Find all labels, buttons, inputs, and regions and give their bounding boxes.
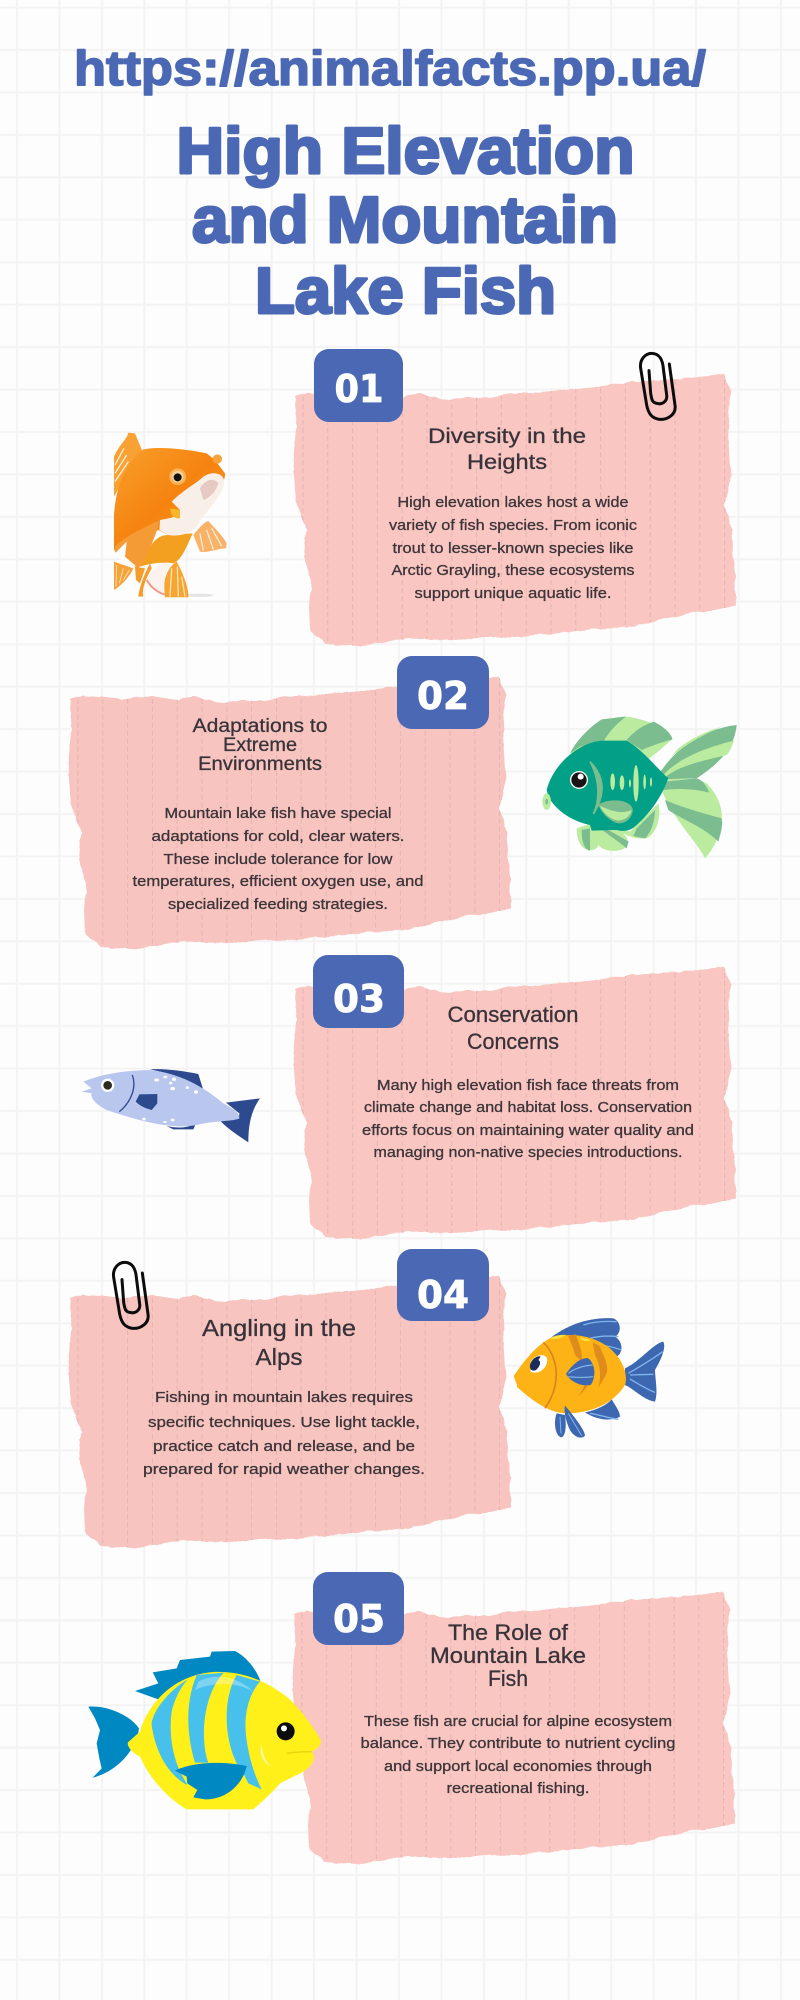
heading 5 — [430, 1620, 586, 1691]
heading 5: The Role of — [448, 1620, 569, 1645]
body text 5: These fish are crucial for alpine ecosystem — [364, 1713, 672, 1730]
heading 4: Alps — [256, 1344, 302, 1370]
panel: conservation concerns — [293, 955, 737, 1241]
heading 3: Concerns — [467, 1029, 559, 1054]
body text 2: specialized feeding strategies. — [168, 896, 388, 913]
panel: the role of mountain lake fish — [292, 1572, 736, 1866]
body text 3: Many high elevation fish face threats from — [377, 1077, 679, 1094]
body text 4 — [143, 1389, 425, 1478]
body text 4: specific techniques. Use light tackle, — [148, 1414, 420, 1431]
torn paper 4 — [68, 1274, 512, 1550]
torn paper 1 — [293, 372, 737, 648]
badge 04 — [397, 1249, 489, 1321]
badge 05: 05 — [333, 1597, 385, 1641]
body text 1: High elevation lakes host a wide — [398, 494, 628, 511]
body text 1: variety of fish species. From iconic — [389, 517, 638, 534]
body text 5: balance. They contribute to nutrient cycling — [360, 1735, 676, 1752]
icon: yellow striped fish — [88, 1651, 321, 1809]
body text 4: practice catch and release, and be — [153, 1438, 415, 1455]
body text 2 — [132, 805, 424, 913]
body text 1: trout to lesser-known species like — [392, 540, 634, 557]
body text 5: and support local economies through — [384, 1758, 652, 1775]
heading 1: Heights — [467, 451, 547, 474]
body text 2: temperatures, efficient oxygen use, and — [132, 873, 424, 890]
title: and Mountain — [192, 183, 618, 256]
panel: adaptations to extreme environments — [68, 656, 512, 951]
heading 2: Adaptations to — [192, 715, 328, 737]
badge 03 — [313, 955, 404, 1028]
body text 3: managing non-native species introductions. — [374, 1144, 682, 1161]
icon: goldfish photo — [113, 433, 227, 597]
body text 3: climate change and habitat loss. Conservation — [364, 1099, 692, 1116]
heading 1 — [428, 425, 586, 474]
heading 4 — [202, 1315, 356, 1370]
body text 1: Arctic Grayling, these ecosystems — [392, 562, 634, 579]
badge 02 — [397, 656, 489, 729]
heading 1: Diversity in the — [428, 425, 586, 448]
icon: orange fish — [514, 1318, 664, 1438]
heading 5: Mountain Lake — [430, 1643, 586, 1668]
badge 03: 03 — [333, 977, 385, 1021]
body text 4: prepared for rapid weather changes. — [143, 1461, 425, 1478]
body text 4: Fishing in mountain lakes requires — [155, 1389, 413, 1406]
title: Lake Fish — [255, 254, 556, 327]
icon: green fish — [542, 717, 737, 858]
heading 3 — [448, 1002, 578, 1054]
badge 01: 01 — [334, 367, 384, 411]
heading 4: Angling in the — [202, 1315, 356, 1341]
panel: diversity in the heights — [293, 349, 737, 648]
body text 5: recreational fishing. — [446, 1780, 590, 1797]
torn paper 5 — [292, 1590, 736, 1866]
heading 5: Fish — [488, 1666, 528, 1691]
title: High Elevation — [176, 114, 634, 187]
heading 2: Environments — [198, 753, 322, 775]
body text 1: support unique aquatic life. — [414, 585, 612, 602]
badge 01 — [314, 349, 403, 422]
paperclip 4 — [113, 1262, 148, 1328]
body text 5 — [360, 1713, 676, 1797]
title — [176, 114, 634, 327]
body text 2: Mountain lake fish have special — [164, 805, 392, 822]
heading 2 — [192, 715, 328, 775]
body text 3 — [362, 1077, 694, 1161]
heading 2: Extreme — [223, 734, 297, 756]
website url: https://animalfacts.pp.ua/ — [74, 42, 706, 96]
torn paper 3 — [293, 965, 737, 1241]
badge 02: 02 — [417, 674, 469, 718]
body text 1 — [389, 494, 638, 602]
badge 04: 04 — [417, 1273, 469, 1317]
body text 2: These include tolerance for low — [164, 851, 393, 868]
heading 3: Conservation — [448, 1002, 578, 1027]
paperclip 1 — [640, 353, 675, 419]
icon: blue fish — [82, 1069, 260, 1142]
panel: angling in the alps — [68, 1249, 512, 1550]
torn paper 2 — [68, 675, 512, 951]
body text 3: efforts focus on maintaining water quality and — [362, 1122, 694, 1139]
badge 05 — [313, 1572, 404, 1645]
body text 2: adaptations for cold, clear waters. — [152, 828, 404, 845]
